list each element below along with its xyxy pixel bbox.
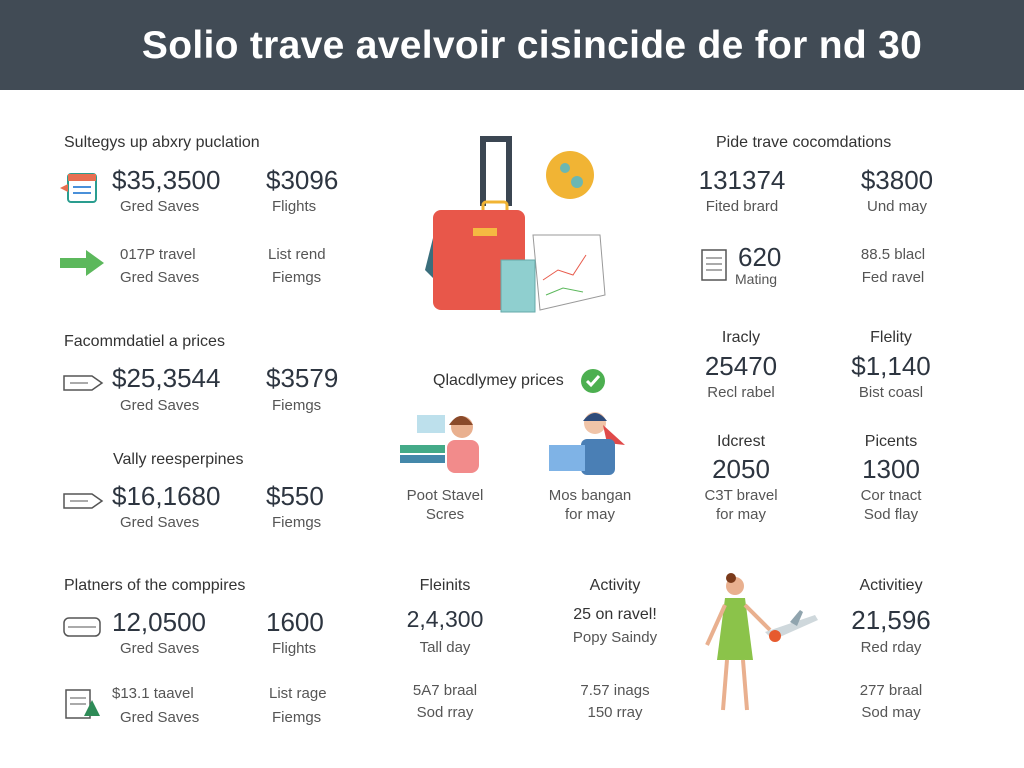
panel: right column: Bist coasl xyxy=(859,384,923,401)
panel: left column: $25,3544 xyxy=(112,363,220,393)
icon: document xyxy=(65,689,100,719)
icon: calendar xyxy=(60,173,97,203)
panel: left column: $550 xyxy=(266,481,324,511)
panel: left column: Gred Saves xyxy=(120,514,199,531)
icon: bus xyxy=(63,617,101,637)
panel: right column: Fed ravel xyxy=(862,269,924,286)
panel: right column: for may xyxy=(716,506,766,523)
icon: check xyxy=(581,369,605,393)
icon: clipboard xyxy=(701,249,727,281)
panel: right column: 1300 xyxy=(862,454,920,484)
panel: right column: Mating xyxy=(735,271,777,287)
panel: left column: Vally reesperpines xyxy=(113,451,243,468)
panel: right column: Picents xyxy=(865,433,917,450)
panel: right column xyxy=(699,134,933,721)
text: Poot Stavel xyxy=(407,487,483,504)
panel: right column: $1,140 xyxy=(851,351,931,381)
text: Mos bangan xyxy=(549,487,631,504)
panel: right column: 620 xyxy=(738,242,781,272)
panel: middle bottom stats: 2,4,300 xyxy=(407,606,483,632)
panel: left column: Gred Saves xyxy=(120,198,199,215)
heading: left section 2: Facommdatiel a prices xyxy=(64,333,225,350)
panel: middle bottom stats: 7.57 inags xyxy=(580,682,650,699)
heading: left section 1: Sultegys up abxry puclation xyxy=(64,134,260,151)
panel: left column: $3096 xyxy=(266,165,338,195)
panel: middle bottom stats: 150 rray xyxy=(587,704,643,721)
panel: right column: Flelity xyxy=(870,329,912,346)
panel: right column: $3800 xyxy=(861,165,933,195)
panel: right column: Pide trave cocomdations xyxy=(716,134,891,151)
illustration: person with laptop xyxy=(549,412,625,475)
panel: left column: Fiemgs xyxy=(272,514,321,531)
panel: left column: Fiemgs xyxy=(272,709,321,726)
panel: middle bottom stats xyxy=(407,577,657,721)
panel: left column: 1600 xyxy=(266,607,324,637)
panel: right column: Idcrest xyxy=(717,433,765,450)
panel: left column: Fiemgs xyxy=(272,269,321,286)
heading: middle prices: Qlacdlymey prices xyxy=(433,372,564,389)
panel: right column: Cor tnact xyxy=(861,487,921,504)
panel: left column: List rage xyxy=(269,685,327,702)
panel: middle bottom stats: 5A7 braal xyxy=(413,682,477,699)
icon: ticket 2 xyxy=(63,493,104,509)
illustration: woman with airplane xyxy=(705,573,818,710)
panel: right column: C3T bravel xyxy=(704,487,778,504)
panel: left column: 017P travel xyxy=(120,246,196,263)
panel: right column: 2050 xyxy=(712,454,770,484)
icon: ticket xyxy=(63,375,104,391)
panel: left column: $16,1680 xyxy=(112,481,220,511)
title: Solio trave avelvoir cisincide de for nd 30 xyxy=(142,24,922,67)
panel: left column: Gred Saves xyxy=(120,640,199,657)
panel: left column: $13.1 taavel xyxy=(112,685,194,702)
panel: middle bottom stats: Tall day xyxy=(420,639,470,656)
panel: left column: Flights xyxy=(272,198,316,215)
panel: right column: 25470 xyxy=(705,351,777,381)
icon: green arrow xyxy=(60,250,104,276)
panel: right column: Fited brard xyxy=(706,198,778,215)
panel: right column: Sod flay xyxy=(864,506,918,523)
panel: right column: Und may xyxy=(867,198,927,215)
panel: left column: Fiemgs xyxy=(272,397,321,414)
panel: left column: 12,0500 xyxy=(112,607,206,637)
panel: middle bottom stats: 25 on ravel! xyxy=(573,606,657,623)
panel: right column: 131374 xyxy=(699,165,785,195)
panel: right column: 88.5 blacl xyxy=(861,246,925,263)
text: for may xyxy=(565,506,615,523)
panel: right column: Sod may xyxy=(861,704,921,721)
panel: left column: List rend xyxy=(268,246,326,263)
panel: right column: Recl rabel xyxy=(707,384,775,401)
panel: right column: Activitiey xyxy=(859,577,923,594)
illustration: person with books xyxy=(400,415,479,473)
panel: left column: Flights xyxy=(272,640,316,657)
panel: left column: $35,3500 xyxy=(112,165,220,195)
header bar xyxy=(0,0,1024,90)
heading: left section 3: Platners of the comppires xyxy=(64,577,245,594)
panel: right column: 21,596 xyxy=(851,605,931,635)
panel: left column: Gred Saves xyxy=(120,709,199,726)
text: Scres xyxy=(426,506,464,523)
panel: right column: Red rday xyxy=(861,639,921,656)
panel: left column: Gred Saves xyxy=(120,269,199,286)
panel: right column: Iracly xyxy=(722,329,760,346)
panel: left column: $3579 xyxy=(266,363,338,393)
panel: right column: 277 braal xyxy=(860,682,922,699)
panel: left column xyxy=(60,134,338,726)
panel: middle bottom stats: Fleinits xyxy=(420,577,470,594)
panel: middle bottom stats: Sod rray xyxy=(417,704,473,721)
illustration: suitcase with documents xyxy=(425,136,606,312)
panel: middle bottom stats: Popy Saindy xyxy=(573,629,657,646)
panel: left column: Gred Saves xyxy=(120,397,199,414)
panel: middle bottom stats: Activity xyxy=(590,577,640,594)
